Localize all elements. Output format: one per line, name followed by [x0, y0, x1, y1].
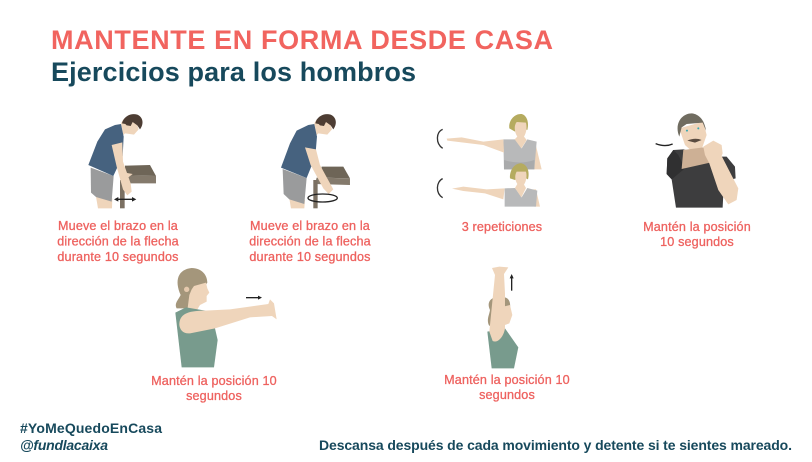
caption: sixth exercise: segundos — [479, 388, 535, 402]
caption: third exercise: 3 repeticiones — [462, 220, 542, 234]
caption: fourth exercise: 10 segundos — [660, 235, 734, 249]
illustration: man circling arm — [281, 114, 350, 208]
illustration: man swinging arm side to side — [88, 114, 156, 208]
subtitle: Ejercicios para los hombros — [51, 57, 416, 87]
caption: fifth exercise: Mantén la posición 10 — [151, 374, 277, 388]
illustration: woman with arm stretched forward — [175, 268, 277, 367]
caption: second exercise: Mueve el brazo en la — [250, 219, 370, 233]
title: MANTENTE EN FORMA DESDE CASA — [51, 25, 553, 55]
caption: sixth exercise: Mantén la posición 10 — [444, 373, 570, 387]
hashtag: #YoMeQuedoEnCasa — [20, 420, 162, 436]
caption: fourth exercise: Mantén la posición — [643, 220, 751, 234]
caption: first exercise: dirección de la flecha — [57, 234, 179, 248]
social handle: @fundlacaixa — [20, 437, 108, 453]
caption: first exercise: durante 10 segundos — [57, 250, 179, 264]
illustration: woman with raised arm, circles — [437, 114, 542, 207]
caption: first exercise: Mueve el brazo en la — [58, 219, 178, 233]
footer note: Descansa después de cada movimiento y detente si te sientes mareado. — [319, 437, 792, 453]
illustration: man stretching arm across chest — [656, 113, 738, 208]
caption: second exercise: durante 10 segundos — [249, 250, 371, 264]
caption: fifth exercise: segundos — [186, 389, 242, 403]
caption: second exercise: dirección de la flecha — [249, 234, 371, 248]
illustration: woman with arm raised overhead — [487, 267, 518, 368]
